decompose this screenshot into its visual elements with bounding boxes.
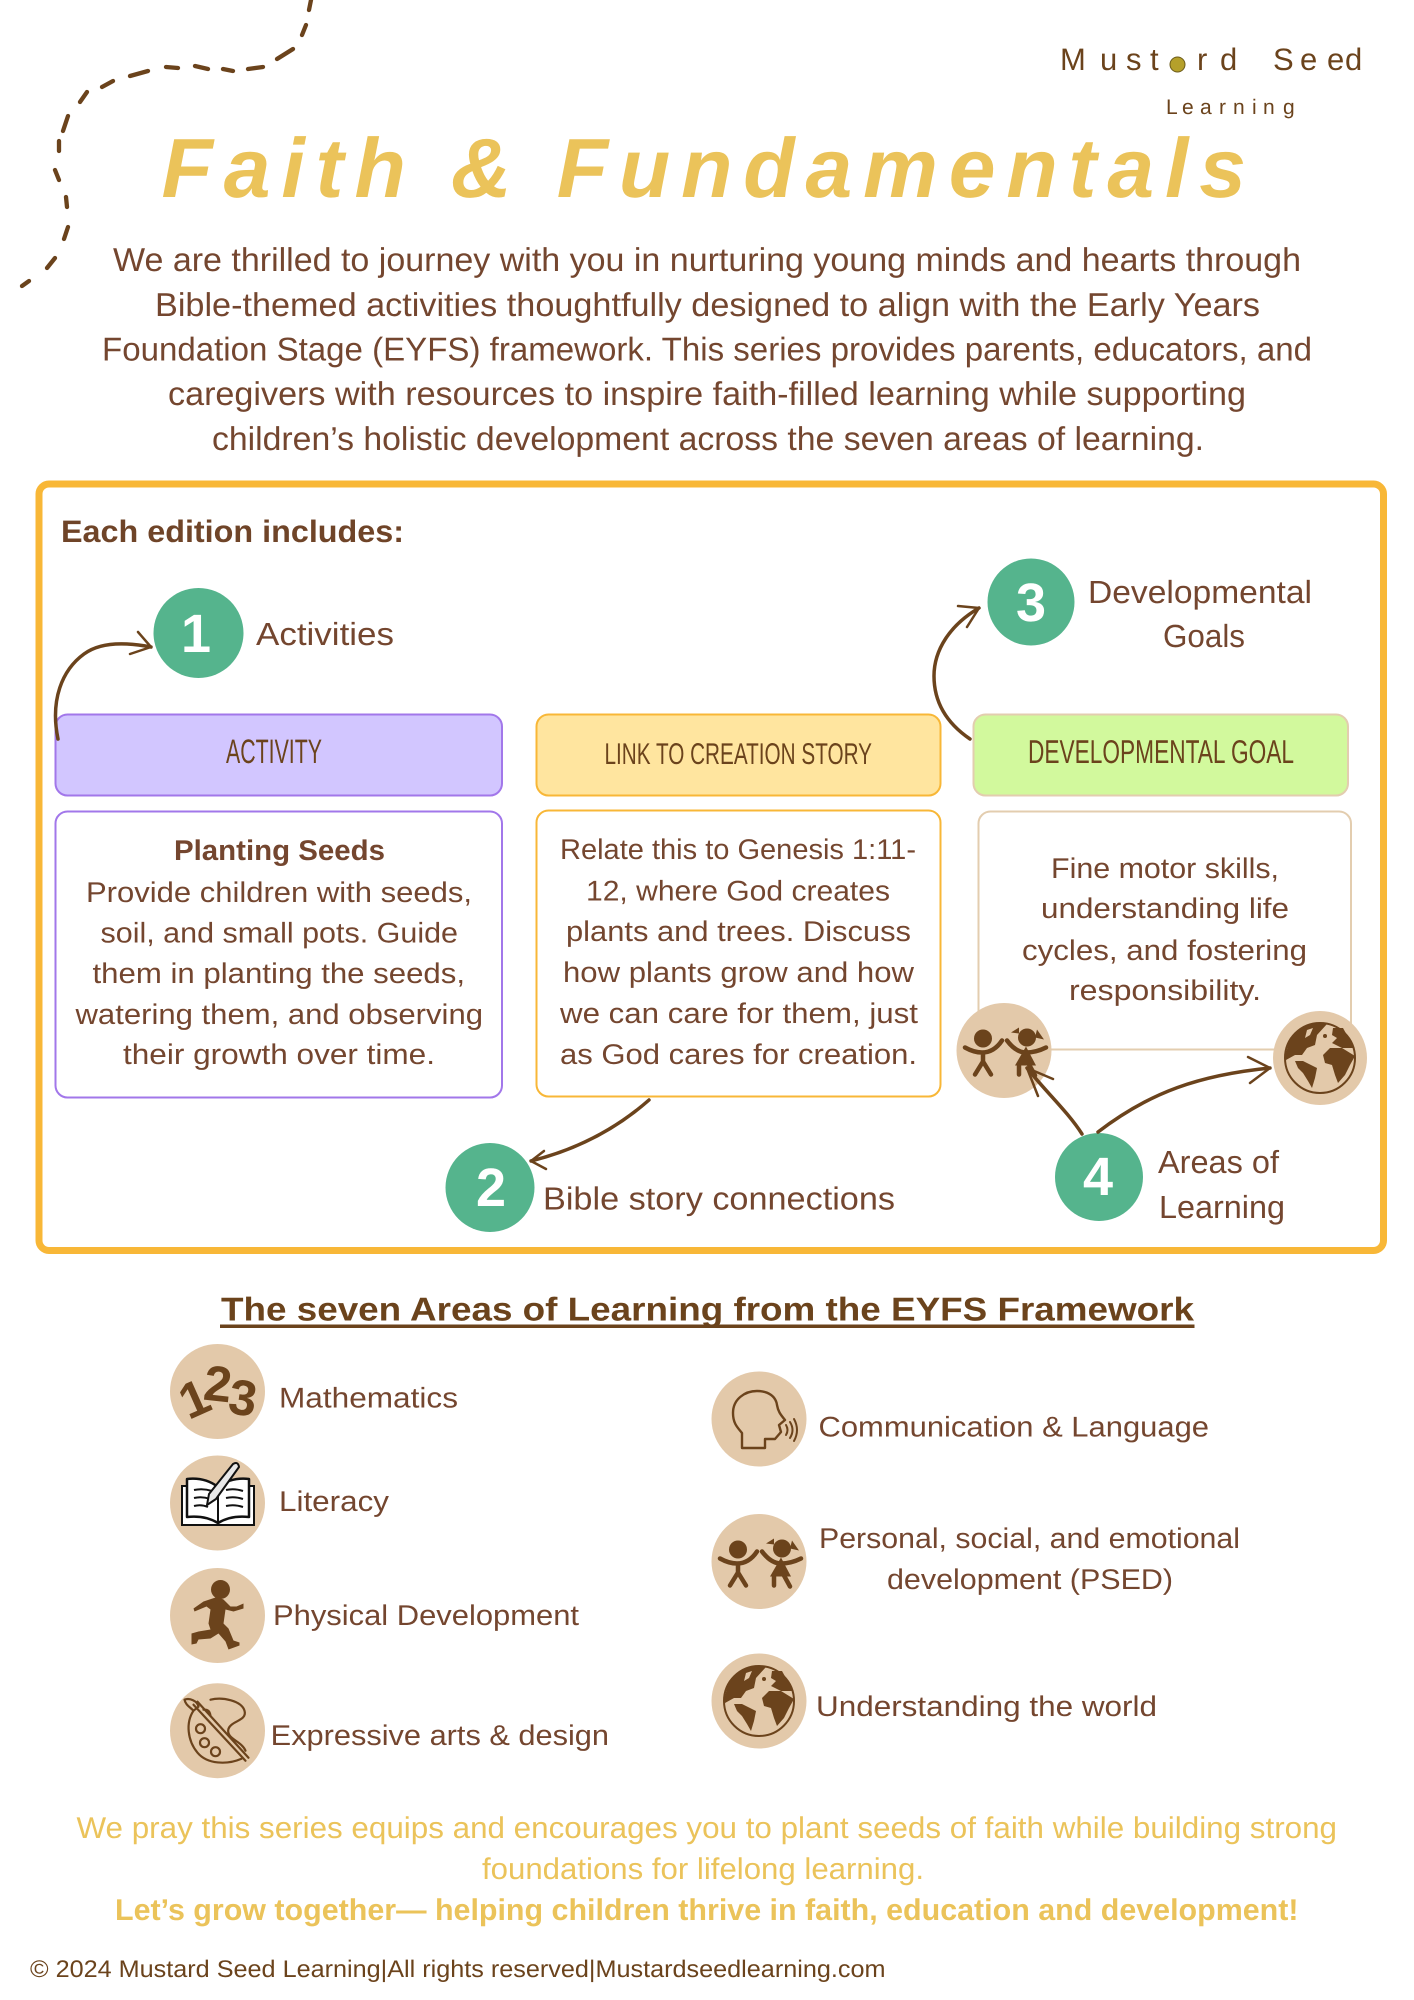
step 3: developmental goals: Goals: [1163, 618, 1245, 654]
step 1: activities: Activities: [256, 616, 394, 652]
logo: Mustard Seed Learning: Learning: [1166, 96, 1295, 119]
icon: globe in goal box: [1273, 1011, 1367, 1105]
goal header: [974, 714, 1348, 796]
icon: globe: [712, 1654, 806, 1748]
icon: children in goal box: [956, 1003, 1052, 1098]
icon: numbers: 2: [201, 1355, 235, 1413]
goal body: responsibility.: [1069, 975, 1261, 1007]
area: communication and language: Communication & Language: [818, 1412, 1209, 1444]
closing prayer message: Let’s grow together— helping children thrive in faith, education and development!: [115, 1894, 1298, 1927]
panel heading: Each edition includes:: [61, 514, 404, 549]
link body: as God cares for creation.: [560, 1039, 917, 1071]
link header: LINK TO CREATION STORY: [604, 738, 872, 771]
goal header: DEVELOPMENTAL GOAL: [1028, 733, 1294, 770]
intro paragraph: caregivers with resources to inspire faith-filled learning while supporting: [168, 375, 1246, 412]
activity body: their growth over time.: [123, 1039, 435, 1071]
closing prayer message: We pray this series equips and encourages you to plant seeds of faith while building strong: [76, 1812, 1337, 1845]
area: understanding the world: Understanding the world: [816, 1691, 1157, 1723]
intro paragraph: [102, 241, 1312, 457]
panel border: [39, 484, 1384, 1250]
goal body: Fine motor skills,: [1051, 853, 1279, 885]
step 4: areas of learning: Areas of: [1158, 1144, 1279, 1180]
icon: numbers: 3: [225, 1368, 261, 1428]
activity body: them in planting the seeds,: [92, 958, 465, 990]
dashed seed trail: [22, 0, 311, 286]
link body: we can care for them, just: [559, 998, 918, 1030]
link header: [536, 714, 940, 796]
creation story column: [536, 714, 940, 1096]
arrow to step 2: [531, 1100, 649, 1169]
activity column: [56, 714, 502, 1098]
icon: book and pencil: [170, 1456, 265, 1550]
icon: numbers: 1: [170, 1368, 218, 1430]
panel: each edition includes: [39, 484, 1384, 1250]
area: personal social emotional: Personal, social, and emotional: [819, 1523, 1240, 1555]
arrow to step 1: [56, 632, 151, 739]
area: expressive arts and design: [170, 1683, 609, 1778]
step 2: bible story connections: Bible story connections: [543, 1180, 895, 1216]
link body: 12, where God creates: [586, 876, 890, 908]
goal body: [978, 812, 1351, 1050]
arrow to children icon: [1027, 1068, 1082, 1134]
area: mathematics: Mathematics: [279, 1382, 458, 1414]
area: understanding the world: [712, 1654, 1157, 1748]
step 3: developmental goals: [988, 558, 1312, 654]
copyright footer: © 2024 Mustard Seed Learning|All rights reserved|Mustardseedlearning.com: [30, 1956, 886, 1983]
logo: Mustard Seed Learning: Must: [1060, 42, 1159, 77]
title: Faith & Fundamentals: [162, 121, 1246, 215]
activity header: [56, 714, 502, 796]
closing prayer message: [76, 1812, 1337, 1927]
step 3: developmental goals: Developmental: [1088, 574, 1312, 610]
step 1: activities: [154, 588, 394, 678]
area: literacy: Literacy: [279, 1486, 390, 1518]
icon: children: [712, 1514, 806, 1609]
link body: Relate this to Genesis 1:11-: [560, 834, 916, 866]
activity body: Provide children with seeds,: [86, 877, 472, 909]
developmental goal column: [974, 714, 1351, 1050]
link body: how plants grow and how: [563, 957, 914, 989]
area: personal social emotional: [712, 1514, 1240, 1609]
intro paragraph: Foundation Stage (EYFS) framework. This series provides parents, educators, and: [102, 330, 1312, 368]
intro paragraph: children’s holistic development across the seven areas of learning.: [212, 420, 1204, 457]
closing prayer message: foundations for lifelong learning.: [482, 1853, 924, 1886]
step 4: areas of learning: 4: [1083, 1147, 1113, 1207]
activity header: ACTIVITY: [226, 733, 322, 771]
step 4: areas of learning: Learning: [1159, 1189, 1285, 1225]
arrow to globe icon: [1098, 1057, 1270, 1132]
icon: speaking head: [712, 1372, 806, 1466]
area: communication and language: [712, 1372, 1209, 1466]
goal body: cycles, and fostering: [1022, 935, 1307, 967]
goal body: understanding life: [1041, 893, 1289, 925]
link body: plants and trees. Discuss: [566, 916, 911, 948]
icon: paint palette: [170, 1683, 265, 1778]
activity body: Planting Seeds: [174, 835, 385, 867]
area: mathematics: [170, 1344, 458, 1439]
step 1: activities: 1: [181, 604, 211, 664]
icon: numbers: [170, 1344, 265, 1439]
area: expressive arts and design: Expressive arts & design: [271, 1720, 609, 1752]
logo: Mustard Seed Learning: Seed: [1273, 42, 1362, 77]
intro paragraph: We are thrilled to journey with you in nurturing young minds and hearts through: [113, 241, 1301, 278]
icon: running child: [170, 1568, 265, 1663]
area: literacy: [170, 1456, 390, 1550]
step 3: developmental goals: 3: [1016, 573, 1046, 633]
activity body: soil, and small pots. Guide: [100, 918, 458, 950]
area: physical development: Physical Development: [273, 1600, 579, 1632]
step 2: bible story connections: [446, 1143, 895, 1232]
activity body: watering them, and observing: [74, 999, 483, 1031]
logo: Mustard Seed Learning: rd: [1197, 42, 1237, 77]
link body: [536, 810, 940, 1096]
arrow to step 3: [934, 606, 979, 739]
heading: seven areas: The seven Areas of Learning from the EYFS Framework: [221, 1290, 1195, 1328]
intro paragraph: Bible-themed activities thoughtfully designed to align with the Early Years: [155, 286, 1260, 323]
area: physical development: [170, 1568, 579, 1663]
step 2: bible story connections: 2: [476, 1158, 506, 1218]
activity body: [56, 812, 502, 1098]
step 4: areas of learning: [1055, 1133, 1285, 1225]
area: personal social emotional: development (PSED): [887, 1564, 1173, 1596]
logo: Mustard Seed Learning: [1060, 42, 1362, 119]
